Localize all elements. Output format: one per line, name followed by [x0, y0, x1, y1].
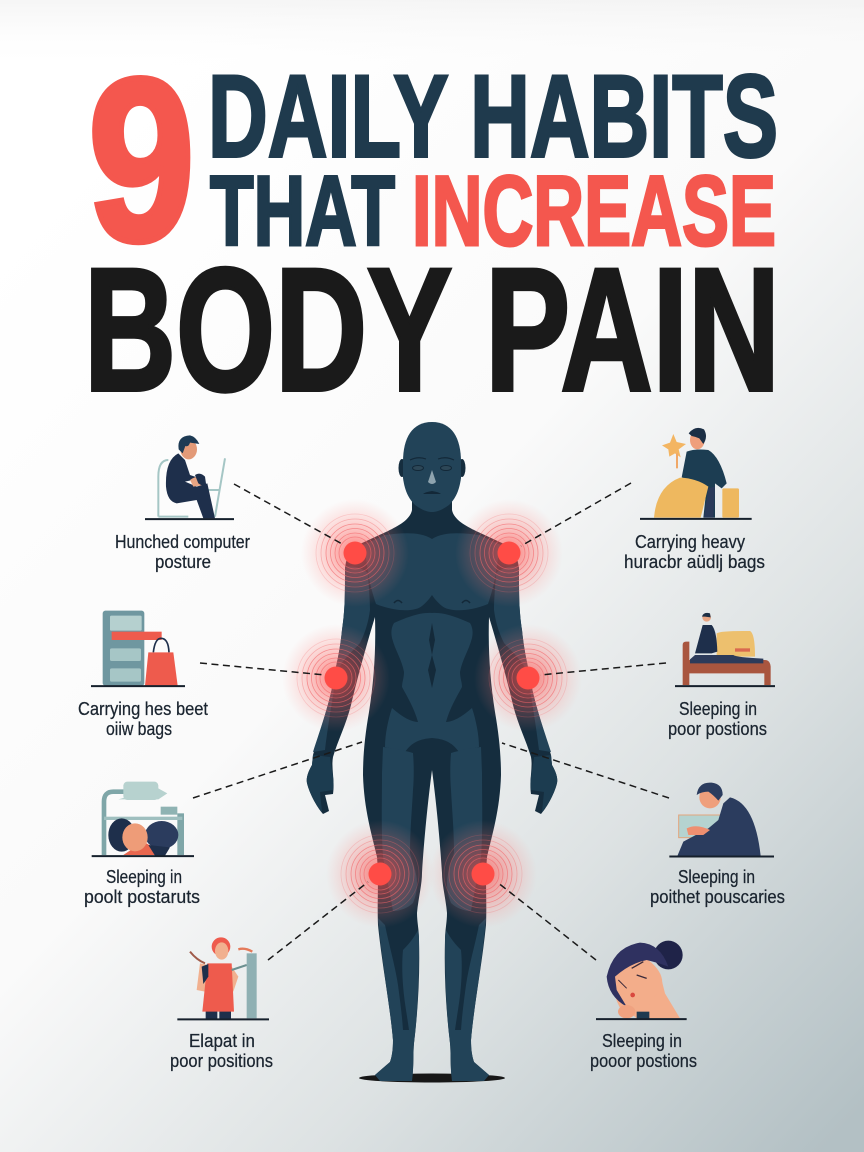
body figure	[307, 422, 557, 1082]
label: sleeping in poor positions: poor postions	[668, 719, 767, 739]
label: carrying bags	[78, 699, 208, 739]
pain: left elbow	[282, 624, 390, 732]
label: hunched computer posture	[115, 532, 250, 572]
label: carrying bags: oiiw bags	[106, 719, 172, 739]
pain: right knee	[429, 820, 537, 928]
label: sleeping in poor positions: Sleeping in	[679, 699, 757, 719]
icon: cabinet and bag	[91, 611, 185, 686]
title line: that: THAT	[210, 155, 395, 266]
icon: sleeping woman	[596, 941, 687, 1019]
pain: right elbow	[474, 624, 582, 732]
icon: man carrying heavy bags	[640, 428, 752, 519]
label: sleeping in poor posture: Sleeping in	[106, 867, 182, 887]
label: carrying heavy bags: huracbr aüdlj bags	[624, 552, 765, 572]
pain: left knee	[326, 820, 434, 928]
label: elapsed in poor positions: Elapat in	[189, 1031, 255, 1051]
ground shadow	[359, 1074, 505, 1082]
label: sleeping in poor positions 2	[590, 1031, 697, 1071]
label: sleeping in poor postures: poithet pouscaries	[650, 887, 785, 907]
icon: hunched computer posture	[145, 435, 234, 519]
label: hunched computer posture: Hunched computer	[115, 532, 250, 552]
label: sleeping in poor positions	[668, 699, 767, 739]
label: elapsed in poor positions: poor positions	[170, 1051, 273, 1071]
icon: woman with tools	[177, 937, 269, 1019]
label: sleeping in poor posture	[84, 867, 200, 907]
pain: left shoulder	[301, 499, 409, 607]
nose	[428, 470, 436, 484]
title	[84, 31, 780, 428]
label: sleeping in poor postures	[650, 867, 785, 907]
icon: man hunched over tablet	[669, 783, 774, 856]
label: sleeping in poor posture: poolt postaruts	[84, 887, 200, 907]
label: sleeping in poor positions 2: Sleeping in	[602, 1031, 682, 1051]
dashed connectors	[193, 483, 669, 960]
label: carrying bags: Carrying hes beet	[78, 699, 208, 719]
label: sleeping in poor postures: Sleeping in	[678, 867, 755, 887]
label: carrying heavy bags: Carrying heavy	[635, 532, 745, 552]
icon: sleeping under lamp	[92, 782, 194, 856]
label: sleeping in poor positions 2: pooor postions	[590, 1051, 697, 1071]
left half of figure	[307, 422, 432, 1081]
numeral 9: 9	[88, 31, 195, 290]
right half of figure	[432, 422, 557, 1081]
navel line	[428, 623, 436, 688]
label: hunched computer posture: posture	[155, 552, 211, 572]
label: carrying heavy bags	[624, 532, 765, 572]
pain markers	[282, 499, 582, 928]
icon: person on bed	[675, 613, 775, 686]
label: elapsed in poor positions	[170, 1031, 273, 1071]
pain: right shoulder	[455, 499, 563, 607]
